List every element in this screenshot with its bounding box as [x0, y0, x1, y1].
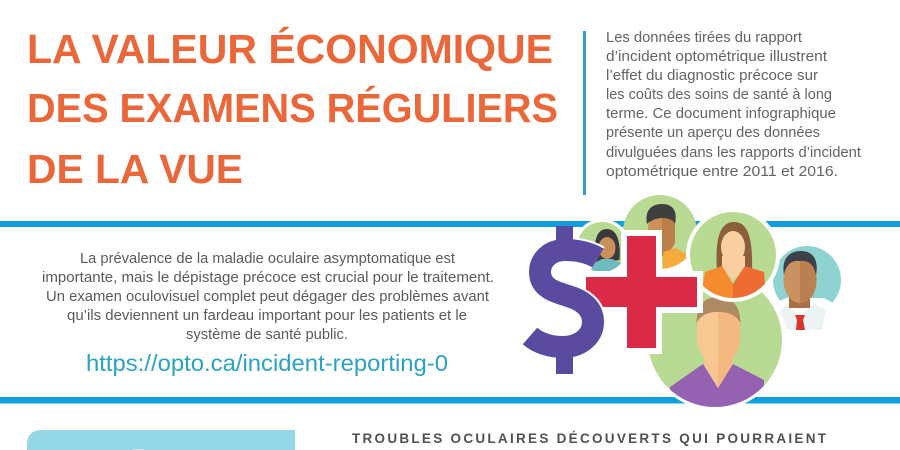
person: doctor	[770, 243, 846, 340]
body text block: qu’ils deviennent un fardeau important pour les patients et le	[67, 308, 467, 324]
bottom blue band	[0, 397, 900, 404]
intro text block: présente un aperçu des données	[606, 125, 820, 141]
icon: red cross	[580, 230, 703, 354]
body text block: Un examen oculovisuel complet peut dégager des problèmes avant	[46, 289, 489, 305]
title: DE LA VUE	[27, 146, 243, 192]
body text block: La prévalence de la maladie oculaire asymptomatique est	[80, 251, 455, 267]
illustration: people, cross and dollar	[530, 195, 846, 410]
intro text block: optométrique entre 2011 et 2016.	[606, 164, 838, 180]
section heading: TROUBLES OCULAIRES DÉCOUVERTS QUI POURRAIENT	[352, 431, 827, 446]
body text block: importante, mais le dépistage précoce est crucial pour le traitement.	[42, 270, 494, 286]
intro text block: l’effet du diagnostic précoce sur	[606, 68, 818, 84]
body text block: système de santé public.	[186, 327, 348, 343]
intro text block: d’incident optométrique illustrent	[606, 49, 827, 65]
person: large man in purple	[650, 291, 782, 407]
panel: teal callout	[27, 430, 295, 450]
vertical divider	[583, 31, 586, 195]
top blue band	[0, 221, 900, 227]
person: small woman	[578, 221, 624, 271]
intro text block: les coûts des soins de santé à long	[606, 87, 832, 103]
person: man in yellow	[623, 195, 697, 275]
icon: dollar sign	[530, 226, 598, 374]
title: LA VALEUR ÉCONOMIQUE	[27, 26, 553, 72]
intro text block: Les données tirées du rapport	[606, 30, 802, 46]
link: https://opto.ca/incident-reporting-0	[86, 350, 448, 376]
person: woman in orange	[686, 208, 780, 302]
intro text block: divulguées dans les rapports d’incident	[606, 145, 861, 161]
body text block	[42, 251, 494, 343]
intro text block	[606, 30, 861, 180]
title	[27, 26, 558, 192]
intro text block: terme. Ce document infographique	[606, 106, 836, 122]
title: DES EXAMENS RÉGULIERS	[27, 85, 558, 131]
